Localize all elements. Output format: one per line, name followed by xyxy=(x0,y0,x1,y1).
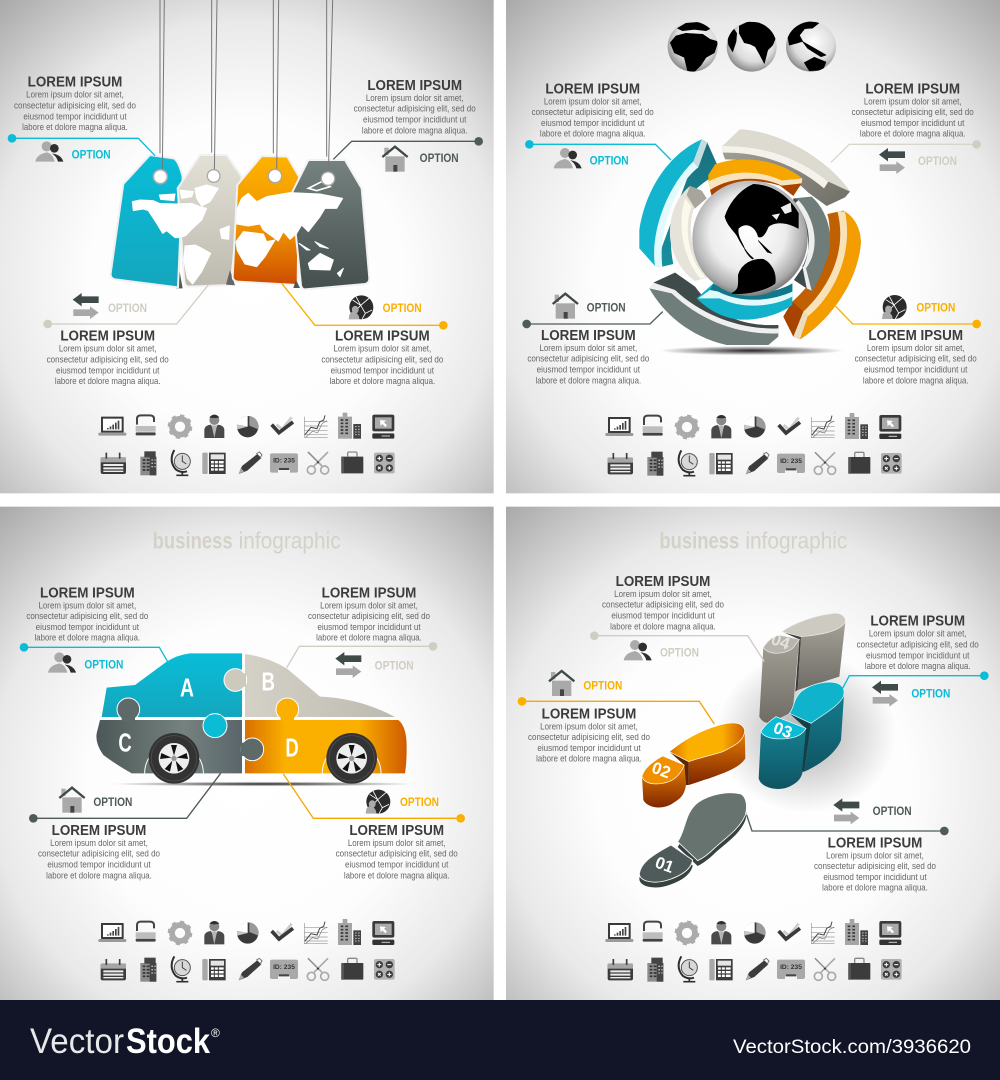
text block: right: Lorem ipsum dolor sit amet, xyxy=(869,629,966,639)
text block: top left: labore et dolore magna aliqua. xyxy=(22,122,128,132)
text block: top left xyxy=(14,75,136,132)
text block: bottom left: labore et dolore magna aliqua. xyxy=(535,375,641,385)
text block: bottom left: eiusmod tempor incididunt ut xyxy=(56,365,160,375)
option label: OPTION xyxy=(72,147,111,161)
text block: bottom right: labore et dolore magna aliqua. xyxy=(863,375,968,385)
icon: people xyxy=(48,652,76,673)
text block: left: LOREM IPSUM xyxy=(542,706,636,722)
icon: arrows xyxy=(872,681,898,707)
footprint 02: 02 xyxy=(649,758,673,782)
option label: OPTION xyxy=(587,301,626,315)
panel title: business xyxy=(659,527,739,553)
icon: house xyxy=(382,147,408,172)
text block: top left: LOREM IPSUM xyxy=(28,75,122,91)
text block: bottom left: Lorem ipsum dolor sit amet, xyxy=(50,838,148,848)
text block: bottom right: Lorem ipsum dolor sit amet, xyxy=(333,344,431,354)
text block: bottom left: consectetur adipisicing elit, sed do xyxy=(38,849,160,859)
text block: bottom right: consectetur adipisicing elit, sed do xyxy=(336,849,458,859)
puzzle piece D xyxy=(245,720,407,773)
icon strip: ID: 235 xyxy=(780,964,802,971)
text block: top left: LOREM IPSUM xyxy=(545,81,640,97)
callout: top right xyxy=(333,137,483,159)
rear wheel xyxy=(322,733,381,784)
callout: top left xyxy=(525,140,671,160)
option label: OPTION xyxy=(911,686,950,700)
footprint 03 xyxy=(759,682,844,789)
text block: bottom right: Lorem ipsum dolor sit amet, xyxy=(348,838,445,848)
text block: bottom left: LOREM IPSUM xyxy=(60,329,155,345)
callout: top right xyxy=(287,642,437,668)
footer logo: Stock xyxy=(126,1022,210,1061)
footer logo xyxy=(30,1022,220,1061)
text block: top right: Lorem ipsum dolor sit amet, xyxy=(864,96,961,106)
icon: people xyxy=(554,148,582,168)
text block: bottom left: Lorem ipsum dolor sit amet, xyxy=(539,343,637,353)
puzzle piece A xyxy=(102,653,242,717)
soft shadow behind footprints xyxy=(716,653,896,813)
text block: bottom right: consectetur adipisicing elit, sed do xyxy=(321,354,443,364)
callout: teal xyxy=(843,671,989,688)
panel title: business xyxy=(153,527,233,553)
panel title: infographic xyxy=(745,527,847,553)
puzzle piece D: D xyxy=(285,733,299,763)
panel title: infographic xyxy=(239,527,341,553)
text block: top right: LOREM IPSUM xyxy=(322,585,416,601)
option label: OPTION xyxy=(84,658,123,672)
text block: left: Lorem ipsum dolor sit amet, xyxy=(540,721,638,731)
text block: bottom: eiusmod tempor incididunt ut xyxy=(823,872,927,882)
text block: bottom left: labore et dolore magna aliqua. xyxy=(46,870,152,880)
footprint 01: 01 xyxy=(653,853,677,877)
text block: bottom left: consectetur adipisicing elit, sed do xyxy=(47,354,169,364)
text block: bottom right: consectetur adipisicing elit, sed do xyxy=(855,354,977,364)
callout: top left xyxy=(8,134,155,156)
callout: top right xyxy=(831,140,981,162)
footer image id: VectorStock.com/3936620 xyxy=(733,1037,971,1058)
icon: house xyxy=(59,788,85,813)
text block: bottom left: eiusmod tempor incididunt ut xyxy=(537,365,640,375)
callout: slate xyxy=(747,815,949,835)
text block: top left: consectetur adipisicing elit, sed do xyxy=(26,611,148,621)
text block: right: consectetur adipisicing elit, sed do xyxy=(857,639,979,649)
text block: top left xyxy=(532,81,654,139)
option label: OPTION xyxy=(916,301,955,315)
text block: top left: eiusmod tempor incididunt ut xyxy=(36,622,139,632)
text block: top right: consectetur adipisicing elit, sed do xyxy=(354,104,476,114)
text block: top left: eiusmod tempor incididunt ut xyxy=(23,111,127,121)
icon: globe head xyxy=(882,295,907,319)
icon strip: ID: 235 xyxy=(273,458,295,465)
hanging price tags with world map xyxy=(111,0,369,289)
panel: price tags xyxy=(0,0,494,493)
text block: top: consectetur adipisicing elit, sed do xyxy=(602,600,724,610)
option label: OPTION xyxy=(660,646,699,660)
option label: OPTION xyxy=(108,301,147,315)
text block: bottom right xyxy=(336,823,458,880)
icon: arrows xyxy=(879,148,905,174)
panel: footprints xyxy=(506,507,1000,1000)
text block: bottom left: consectetur adipisicing elit, sed do xyxy=(527,354,649,364)
text block: top right: eiusmod tempor incididunt ut xyxy=(861,118,965,128)
central globe xyxy=(692,181,808,296)
text block: bottom right: labore et dolore magna aliqua. xyxy=(329,376,435,386)
ring segment: orange outer xyxy=(783,211,861,339)
footprint 04 xyxy=(759,613,845,723)
icon strip xyxy=(98,413,395,475)
text block: top: Lorem ipsum dolor sit amet, xyxy=(614,589,712,599)
text block: top: LOREM IPSUM xyxy=(616,574,710,590)
option label: OPTION xyxy=(590,153,629,167)
text block: top left: eiusmod tempor incididunt ut xyxy=(541,118,645,128)
segmented ring around globe xyxy=(639,129,861,345)
text block: right: labore et dolore magna aliqua. xyxy=(865,661,970,671)
text block: top left: Lorem ipsum dolor sit amet, xyxy=(38,600,136,610)
text block: right xyxy=(857,614,979,671)
footprint 03: 03 xyxy=(771,718,795,742)
text block: right: eiusmod tempor incididunt ut xyxy=(866,650,970,660)
text block: top right xyxy=(354,78,476,135)
text block: bottom right: LOREM IPSUM xyxy=(868,328,963,344)
text block: bottom left: eiusmod tempor incididunt ut xyxy=(47,860,151,870)
text block: bottom right: LOREM IPSUM xyxy=(349,823,444,839)
icon: house xyxy=(549,671,574,696)
callout: bottom left xyxy=(522,312,663,328)
text block: bottom: labore et dolore magna aliqua. xyxy=(822,883,928,893)
text block: bottom right: eiusmod tempor incididunt ut xyxy=(331,365,434,375)
ring segment: teal inner xyxy=(697,283,792,320)
ring segment: beige outer xyxy=(723,129,850,206)
footer logo: ® xyxy=(211,1026,220,1040)
panel: puzzle car xyxy=(0,507,494,1000)
panel title xyxy=(659,527,847,553)
text block: top right: Lorem ipsum dolor sit amet, xyxy=(366,93,463,103)
option label: OPTION xyxy=(93,795,132,809)
text block: top: eiusmod tempor incididunt ut xyxy=(611,611,715,621)
puzzle car illustration xyxy=(96,653,417,786)
text block: top right: labore et dolore magna aliqua. xyxy=(316,633,422,643)
option label: OPTION xyxy=(873,804,912,818)
text block: top right xyxy=(308,585,430,643)
ground shadow xyxy=(660,346,843,355)
puzzle piece C xyxy=(96,720,242,773)
text block: top left: LOREM IPSUM xyxy=(40,585,135,601)
text block: left: consectetur adipisicing elit, sed do xyxy=(528,732,650,742)
ring segment: orange inner xyxy=(708,159,802,196)
option label: OPTION xyxy=(420,151,459,165)
text block: bottom right xyxy=(855,328,977,385)
text block: bottom left: Lorem ipsum dolor sit amet, xyxy=(59,344,156,354)
text block: bottom left: labore et dolore magna aliqua. xyxy=(55,376,160,386)
text block: top left: labore et dolore magna aliqua. xyxy=(34,633,140,643)
footprint 02 xyxy=(642,723,745,807)
puzzle knob: beige xyxy=(224,669,247,691)
callout: top left xyxy=(20,643,168,662)
puzzle piece B xyxy=(245,654,395,717)
icon: globe head xyxy=(366,790,390,814)
icon: people xyxy=(624,640,652,660)
text block: top right: Lorem ipsum dolor sit amet, xyxy=(320,600,418,610)
icon: arrows xyxy=(73,293,99,319)
text block: left: eiusmod tempor incididunt ut xyxy=(537,743,641,753)
text block: top right: eiusmod tempor incididunt ut xyxy=(363,115,467,125)
text block: bottom right: eiusmod tempor incididunt ut xyxy=(345,860,449,870)
text block: top: labore et dolore magna aliqua. xyxy=(610,621,716,631)
footer logo: Vector xyxy=(30,1022,124,1061)
text block: left: labore et dolore magna aliqua. xyxy=(536,754,642,764)
callout: bottom left xyxy=(29,773,221,823)
icon strip: ID: 235 xyxy=(273,964,295,971)
callout: bottom right xyxy=(283,774,465,823)
text block: top left: consectetur adipisicing elit, sed do xyxy=(14,100,136,110)
icon strip xyxy=(98,919,395,982)
callout: beige xyxy=(590,631,764,662)
text block: bottom left: LOREM IPSUM xyxy=(541,328,636,344)
text block: top left: Lorem ipsum dolor sit amet, xyxy=(544,96,641,106)
puzzle piece B: B xyxy=(262,667,275,697)
callout: bottom right xyxy=(834,305,981,328)
ring segment: teal outer xyxy=(639,139,717,267)
option label: OPTION xyxy=(400,795,439,809)
text block: top right xyxy=(852,81,974,139)
text block: top xyxy=(602,574,724,631)
ring segment: beige inner xyxy=(670,186,710,281)
text block: bottom right: Lorem ipsum dolor sit amet, xyxy=(867,343,964,353)
callout: bottom left xyxy=(43,285,208,328)
ring segment: slate outer xyxy=(649,273,778,345)
text block: bottom: consectetur adipisicing elit, sed do xyxy=(814,861,936,871)
puzzle piece C: C xyxy=(118,727,132,757)
panel title xyxy=(153,527,341,553)
puzzle piece A: A xyxy=(180,673,194,703)
option label: OPTION xyxy=(383,301,422,315)
callout: bottom right xyxy=(282,283,448,330)
icon strip xyxy=(605,919,902,982)
footprint 01 xyxy=(639,793,747,887)
text block: bottom xyxy=(814,835,936,893)
option label: OPTION xyxy=(583,678,622,692)
text block: top right: consectetur adipisicing elit, sed do xyxy=(308,611,430,621)
icon: house xyxy=(553,294,578,319)
text block: top right: LOREM IPSUM xyxy=(367,78,462,94)
puzzle knob: teal xyxy=(203,714,227,738)
icon: arrows xyxy=(335,652,361,678)
footprint 04: 04 xyxy=(769,629,793,654)
text block: top right: consectetur adipisicing elit, sed do xyxy=(852,107,974,117)
text block: bottom left xyxy=(38,823,160,880)
text block: bottom left xyxy=(527,328,649,385)
text block: top left: labore et dolore magna aliqua. xyxy=(540,129,645,139)
text block: top left: consectetur adipisicing elit, sed do xyxy=(532,107,654,117)
text block: bottom: Lorem ipsum dolor sit amet, xyxy=(826,850,924,860)
callout: orange xyxy=(518,697,714,724)
icon: people xyxy=(35,141,63,162)
text block: bottom right: LOREM IPSUM xyxy=(335,329,430,345)
option label: OPTION xyxy=(375,658,414,672)
text block: bottom right: labore et dolore magna aliqua. xyxy=(344,870,449,880)
puzzle knob: orange xyxy=(276,698,299,721)
three small globes xyxy=(668,21,836,72)
text block: bottom left xyxy=(47,329,169,386)
panel: globe rings xyxy=(506,0,1000,493)
text block: top left: Lorem ipsum dolor sit amet, xyxy=(26,90,124,100)
text block: bottom: LOREM IPSUM xyxy=(828,835,922,851)
text block: top right: LOREM IPSUM xyxy=(865,81,960,97)
icon: arrows xyxy=(833,798,859,824)
text block: right: LOREM IPSUM xyxy=(870,614,965,630)
footer band xyxy=(0,1000,1000,1080)
puzzle knob: slate side xyxy=(241,738,264,761)
text block: bottom left: LOREM IPSUM xyxy=(52,823,146,839)
icon strip: ID: 235 xyxy=(780,458,802,465)
text block: top left xyxy=(26,585,148,643)
text block: top right: labore et dolore magna aliqua. xyxy=(860,129,965,139)
icon strip xyxy=(605,413,902,476)
text block: bottom right: eiusmod tempor incididunt ut xyxy=(864,365,968,375)
option label: OPTION xyxy=(918,154,957,168)
text block: top right: labore et dolore magna aliqua. xyxy=(362,125,467,135)
ring segment: slate inner xyxy=(793,197,830,292)
puzzle knob: slate top xyxy=(117,698,140,721)
text block: bottom right xyxy=(321,329,443,386)
text block: top right: eiusmod tempor incididunt ut xyxy=(317,622,421,632)
text block: left xyxy=(528,706,650,764)
icon: globe head xyxy=(349,295,373,319)
front wheel xyxy=(145,733,203,784)
